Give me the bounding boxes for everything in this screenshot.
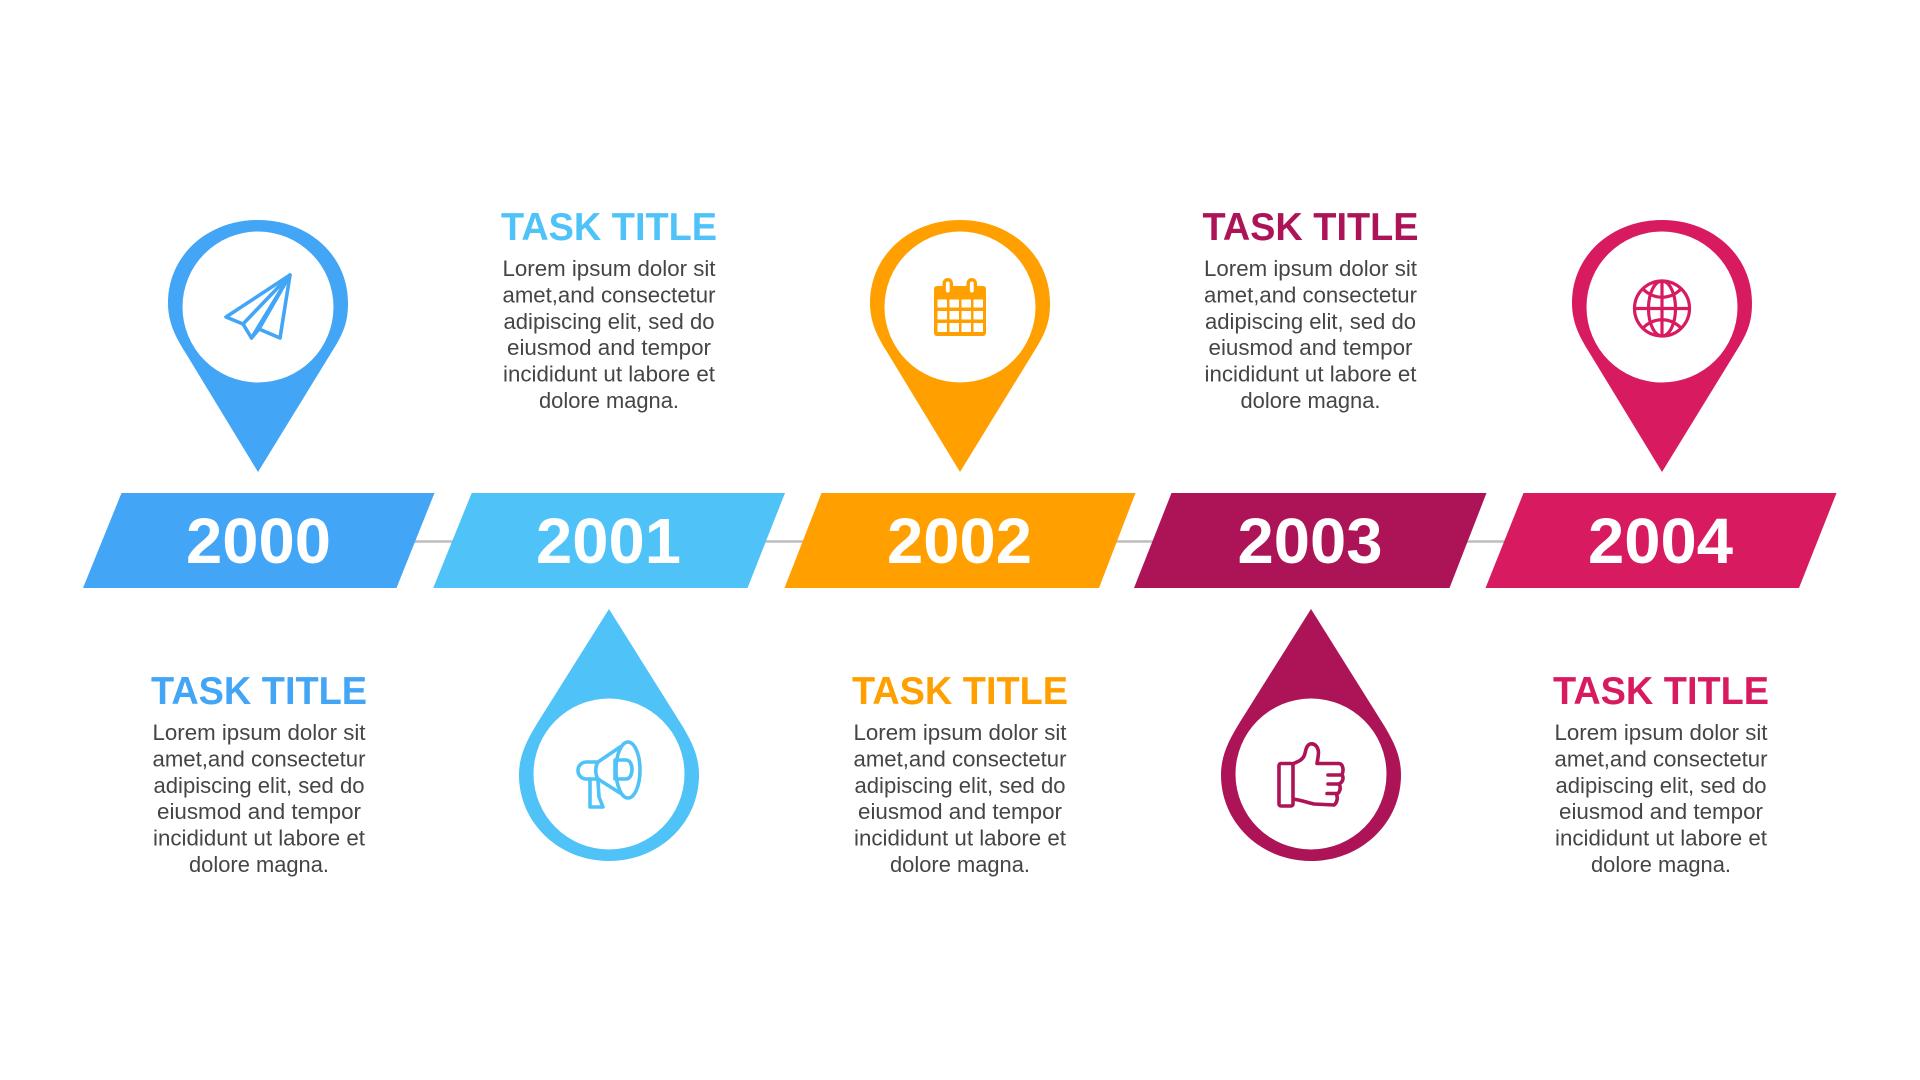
task text 2000 (151, 670, 367, 877)
year bar 2004 (1486, 493, 1836, 588)
task text 2004: amet,and consectetur (1554, 746, 1768, 771)
drop marker 2001 (519, 609, 699, 861)
task text 2004: incididunt ut labore et (1555, 826, 1767, 851)
task text 2002: dolore magna. (890, 852, 1030, 877)
task text 2000: eiusmod and tempor (157, 799, 361, 824)
task text 2001: Lorem ipsum dolor sit (502, 256, 716, 281)
task text 2004: dolore magna. (1591, 852, 1731, 877)
task text 2002 (852, 670, 1068, 877)
task text 2000: TASK TITLE (151, 670, 367, 713)
pin marker 2004 (1572, 220, 1752, 472)
task text 2004: TASK TITLE (1553, 670, 1769, 713)
year bar 2002 (784, 493, 1136, 588)
icon: calendar (934, 278, 986, 336)
task text 2003 (1202, 206, 1418, 413)
icon: megaphone (578, 742, 640, 807)
icon: paper plane (226, 275, 290, 338)
year bar 2003: 2003 (1238, 505, 1382, 577)
task text 2003: incididunt ut labore et (1204, 362, 1416, 387)
year bar 2002: 2002 (887, 505, 1032, 577)
task text 2004: eiusmod and tempor (1559, 799, 1763, 824)
task text 2003: TASK TITLE (1202, 206, 1418, 249)
task text 2002: incididunt ut labore et (854, 826, 1066, 851)
year bar 2001 (433, 493, 785, 588)
task text 2004 (1553, 670, 1769, 877)
task text 2003: Lorem ipsum dolor sit (1204, 256, 1417, 281)
panel: 2003 (1134, 206, 1486, 861)
year bar 2001: 2001 (536, 505, 681, 577)
task text 2002: Lorem ipsum dolor sit (854, 720, 1066, 745)
task text 2001: amet,and consectetur (502, 282, 716, 307)
task text 2001 (501, 206, 717, 413)
panel: 2002 (784, 220, 1136, 877)
task text 2003: amet,and consectetur (1204, 282, 1417, 307)
task text 2003: eiusmod and tempor (1208, 335, 1412, 360)
task text 2001: dolore magna. (539, 388, 679, 413)
task text 2002: TASK TITLE (852, 670, 1068, 713)
task text 2001: adipiscing elit, sed do (504, 309, 714, 334)
task text 2000: amet,and consectetur (152, 746, 366, 771)
pin marker 2000 (168, 220, 348, 472)
year bar 2000: 2000 (186, 505, 331, 577)
task text 2004: adipiscing elit, sed do (1556, 773, 1766, 798)
year bar 2000 (83, 493, 434, 588)
panel: 2004 (1486, 220, 1836, 877)
task text 2000: incididunt ut labore et (153, 826, 365, 851)
drop marker 2003 (1221, 609, 1401, 861)
task text 2000: adipiscing elit, sed do (154, 773, 364, 798)
task text 2000: dolore magna. (189, 852, 329, 877)
task text 2001: eiusmod and tempor (507, 335, 711, 360)
task text 2001: TASK TITLE (501, 206, 717, 249)
task text 2001: incididunt ut labore et (503, 362, 715, 387)
connector lines between year bars (400, 540, 1520, 543)
task text 2002: amet,and consectetur (854, 746, 1066, 771)
task text 2000: Lorem ipsum dolor sit (152, 720, 366, 745)
icon: globe (1634, 281, 1690, 336)
task text 2002: eiusmod and tempor (858, 799, 1062, 824)
panel: 2000 (83, 220, 434, 877)
task text 2003: dolore magna. (1240, 388, 1380, 413)
year bar 2003 (1134, 493, 1486, 588)
pin marker 2002 (870, 220, 1050, 472)
icon: thumbs up (1279, 744, 1343, 806)
task text 2002: adipiscing elit, sed do (854, 773, 1066, 798)
panel: 2001 (433, 206, 785, 861)
year bar 2004: 2004 (1588, 505, 1733, 577)
task text 2004: Lorem ipsum dolor sit (1554, 720, 1768, 745)
task text 2003: adipiscing elit, sed do (1205, 309, 1416, 334)
